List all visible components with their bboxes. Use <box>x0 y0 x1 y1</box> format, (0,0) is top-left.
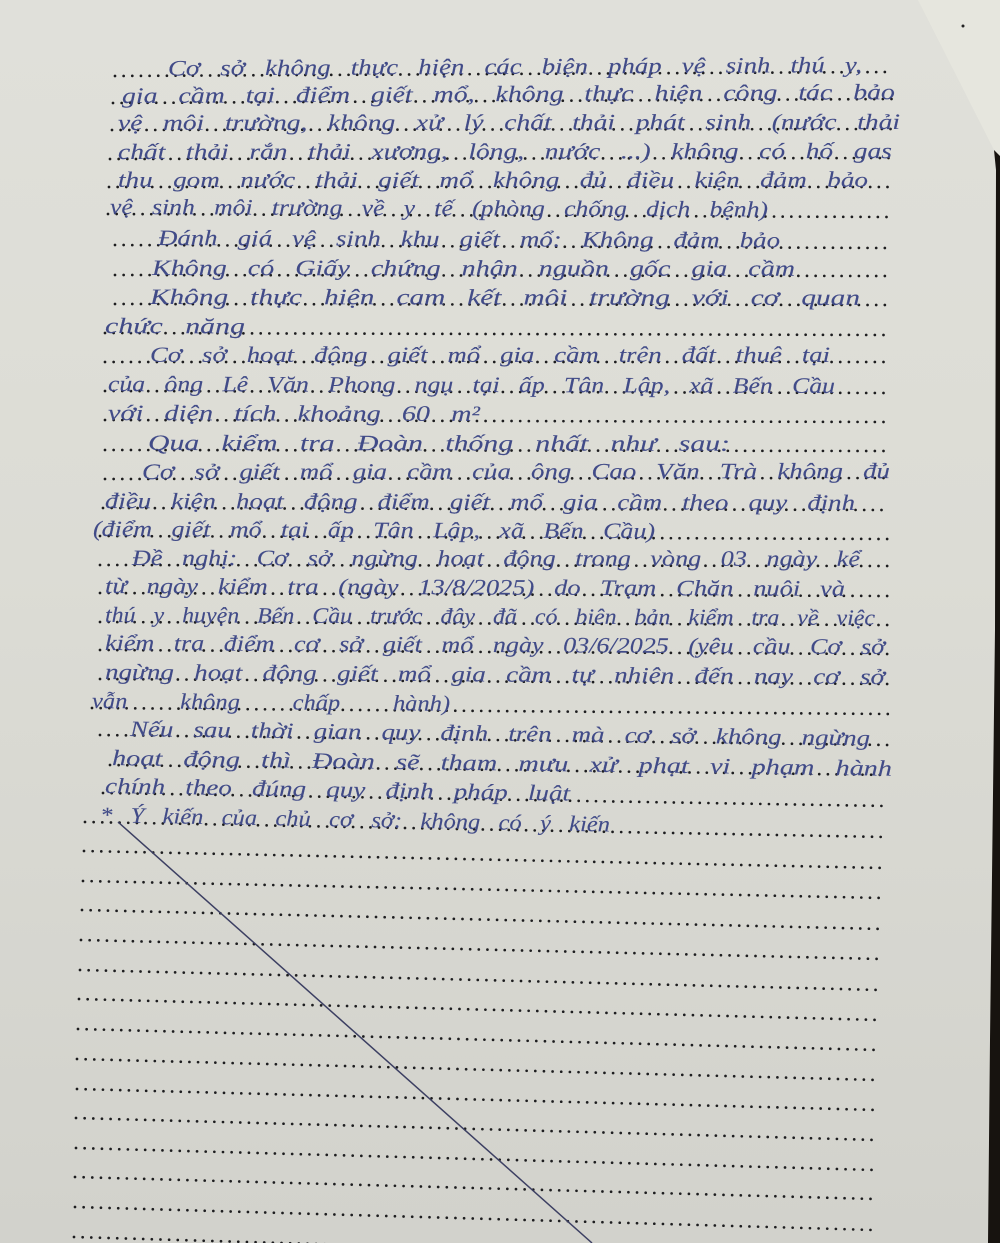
handwriting line 15: Cơ sở giết mổ gia cầm của ông Cao Văn Trà không đủ <box>142 458 890 484</box>
handwriting line 10: chức năng <box>105 313 245 338</box>
handwriting line 23: vẫn không chấp hành) <box>92 688 450 716</box>
handwriting line 25: hoạt động thì Đoàn sẽ tham mưu xử phạt vi phạm hành <box>112 745 892 781</box>
handwriting line 7 <box>115 225 890 252</box>
handwriting line 14: Qua kiểm tra Đoàn thống nhất như sau: <box>148 430 730 456</box>
handwriting line 19: từ ngày kiểm tra (ngày 13/8/2025) do Trạm Chăn nuôi và <box>105 573 845 601</box>
back page corner <box>918 0 1000 156</box>
handwriting line 26: chính theo đúng quy định pháp luật <box>105 773 571 806</box>
diagonal strike-through line <box>118 822 592 1243</box>
handwriting line 21: kiểm tra điểm cơ sở giết mổ ngày 03/6/2025 (yêu cầu Cơ sở <box>105 630 887 659</box>
handwriting line 9: Không thực hiện cam kết môi trường với cơ quan <box>149 284 860 310</box>
handwriting line 4: chất thải rắn thải xương, lông, nước ...) không có hố gas <box>118 138 892 164</box>
handwriting line 7: Đánh giá vệ sinh khu giết mổ: Không đảm bảo <box>157 225 780 252</box>
handwriting line 16: điều kiện hoạt động điểm giết mổ gia cầm theo quy định <box>105 488 855 515</box>
handwriting line 24: Nếu sau thời gian quy định trên mà cơ sở không ngừng <box>129 716 870 750</box>
handwriting line 27 <box>85 802 885 837</box>
handwriting line 17 <box>93 516 888 543</box>
handwriting line 18: Đề nghị: Cơ sở ngừng hoạt động trong vòng 03 ngày kể <box>131 545 863 571</box>
handwriting line 5: thu gom nước thải giết mổ không đủ điều kiện đảm bảo <box>118 167 868 192</box>
handwriting line 1: Cơ sở không thực hiện các biện pháp vệ sinh thú y, <box>168 52 862 80</box>
handwriting line 17: (điểm giết mổ tại ấp Tân Lập, xã Bến Cầu) <box>93 516 655 543</box>
handwriting line 11: Cơ sở hoạt động giết mổ gia cầm trên đất thuê tại <box>150 342 830 367</box>
handwriting line 20: thú y huyện Bến Cầu trước đây đã có biên bản kiểm tra về việc <box>105 602 875 630</box>
handwriting line 26 <box>103 773 886 806</box>
handwriting line 12: của ông Lê Văn Phong ngụ tại ấp Tân Lập, xã Bến Cầu <box>108 371 835 398</box>
handwriting line 23 <box>92 688 888 716</box>
blank dotted lines <box>74 851 884 1243</box>
handwriting line 3: vệ môi trường, không xử lý chất thải phát sinh (nước thải <box>118 109 900 135</box>
dark table edge <box>988 150 1000 1243</box>
handwriting line 2: gia cầm tại điểm giết mổ, không thực hiện công tác bảo <box>122 79 895 108</box>
handwriting line 6: vệ sinh môi trường về y tế (phòng chống dịch bệnh) <box>110 194 768 222</box>
handwriting line 22: ngừng hoạt động giết mổ gia cầm tự nhiên đến nay cơ sở <box>105 659 887 689</box>
handwriting line 13: với diện tích khoảng 60 m² <box>108 400 481 426</box>
handwriting line 27: * Ý kiến của chủ cơ sở: không có ý kiến <box>100 802 610 837</box>
handwriting line 8: Không có Giấy chứng nhận nguồn gốc gia cầm <box>151 255 795 281</box>
